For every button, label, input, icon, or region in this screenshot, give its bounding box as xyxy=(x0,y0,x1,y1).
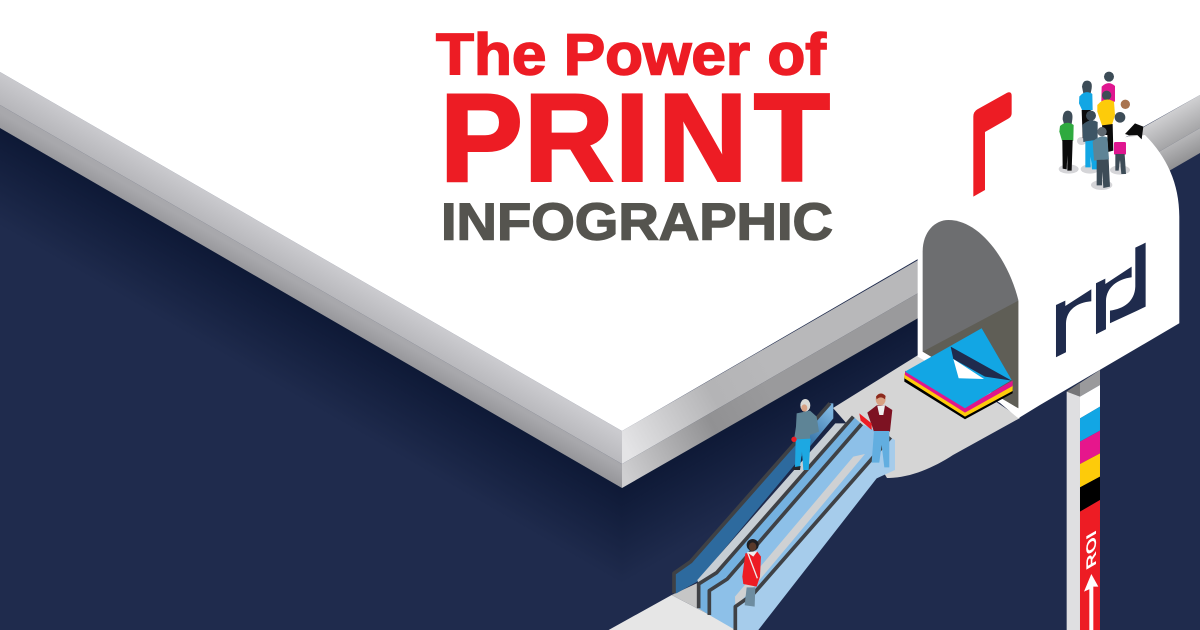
person: white with tan head and black legs xyxy=(1121,100,1143,139)
ROI label: ROI xyxy=(1084,527,1100,572)
background shadow beneath the white chevron xyxy=(0,128,918,630)
person: magenta top xyxy=(1101,72,1115,103)
mailbox opening inner wall xyxy=(923,301,1018,408)
white chevron panel xyxy=(0,0,1200,431)
person: woman in red dress xyxy=(742,539,761,607)
mailbox xyxy=(904,92,1179,419)
outer light blue glass xyxy=(735,437,895,630)
pole side face xyxy=(1067,392,1080,630)
CMYK colour bands xyxy=(1080,385,1100,630)
black, yellow and magenta layers xyxy=(904,377,1013,419)
rrd logo xyxy=(1056,243,1146,357)
outer glass balustrade xyxy=(673,403,833,593)
up arrow xyxy=(1084,574,1098,630)
person: dark blue jacket xyxy=(1082,111,1098,169)
blue envelope xyxy=(905,328,1012,408)
person: grey jacket xyxy=(1093,127,1110,188)
floor platform under the mailbox xyxy=(833,352,1020,478)
person: yellow top xyxy=(1097,91,1115,152)
lower landing xyxy=(597,595,750,630)
group of people on the mailbox xyxy=(1059,72,1143,190)
person: green top xyxy=(1059,111,1074,171)
title line: PRINT: PRINT xyxy=(440,70,830,208)
chevron left bevel xyxy=(0,72,622,488)
title xyxy=(436,22,833,252)
envelope flap xyxy=(951,347,1012,381)
person: cyan top xyxy=(1079,81,1093,138)
inner steps strip xyxy=(697,423,847,584)
envelope stack xyxy=(904,328,1013,419)
blue glass between the inner handrails xyxy=(699,417,862,615)
light blue glass beside the steps xyxy=(709,424,891,630)
pole with CMYK bands xyxy=(1067,370,1100,630)
mailbox opening upper wall xyxy=(923,220,1018,408)
escalator xyxy=(597,393,895,630)
person shadows xyxy=(1059,137,1130,190)
person: older man xyxy=(791,399,819,470)
dark handrails xyxy=(674,403,891,630)
person: white and magenta xyxy=(1114,112,1126,174)
person: man with red booklet xyxy=(859,393,892,467)
mailbox body xyxy=(918,135,1179,418)
envelope letter xyxy=(953,359,984,379)
title line: The Power of: The Power of xyxy=(436,22,827,88)
pole top shadow xyxy=(1067,370,1100,397)
chevron right bevel xyxy=(622,95,1200,488)
red flag xyxy=(973,92,1012,197)
title line: INFOGRAPHIC: INFOGRAPHIC xyxy=(441,194,833,252)
step strip xyxy=(735,454,865,607)
